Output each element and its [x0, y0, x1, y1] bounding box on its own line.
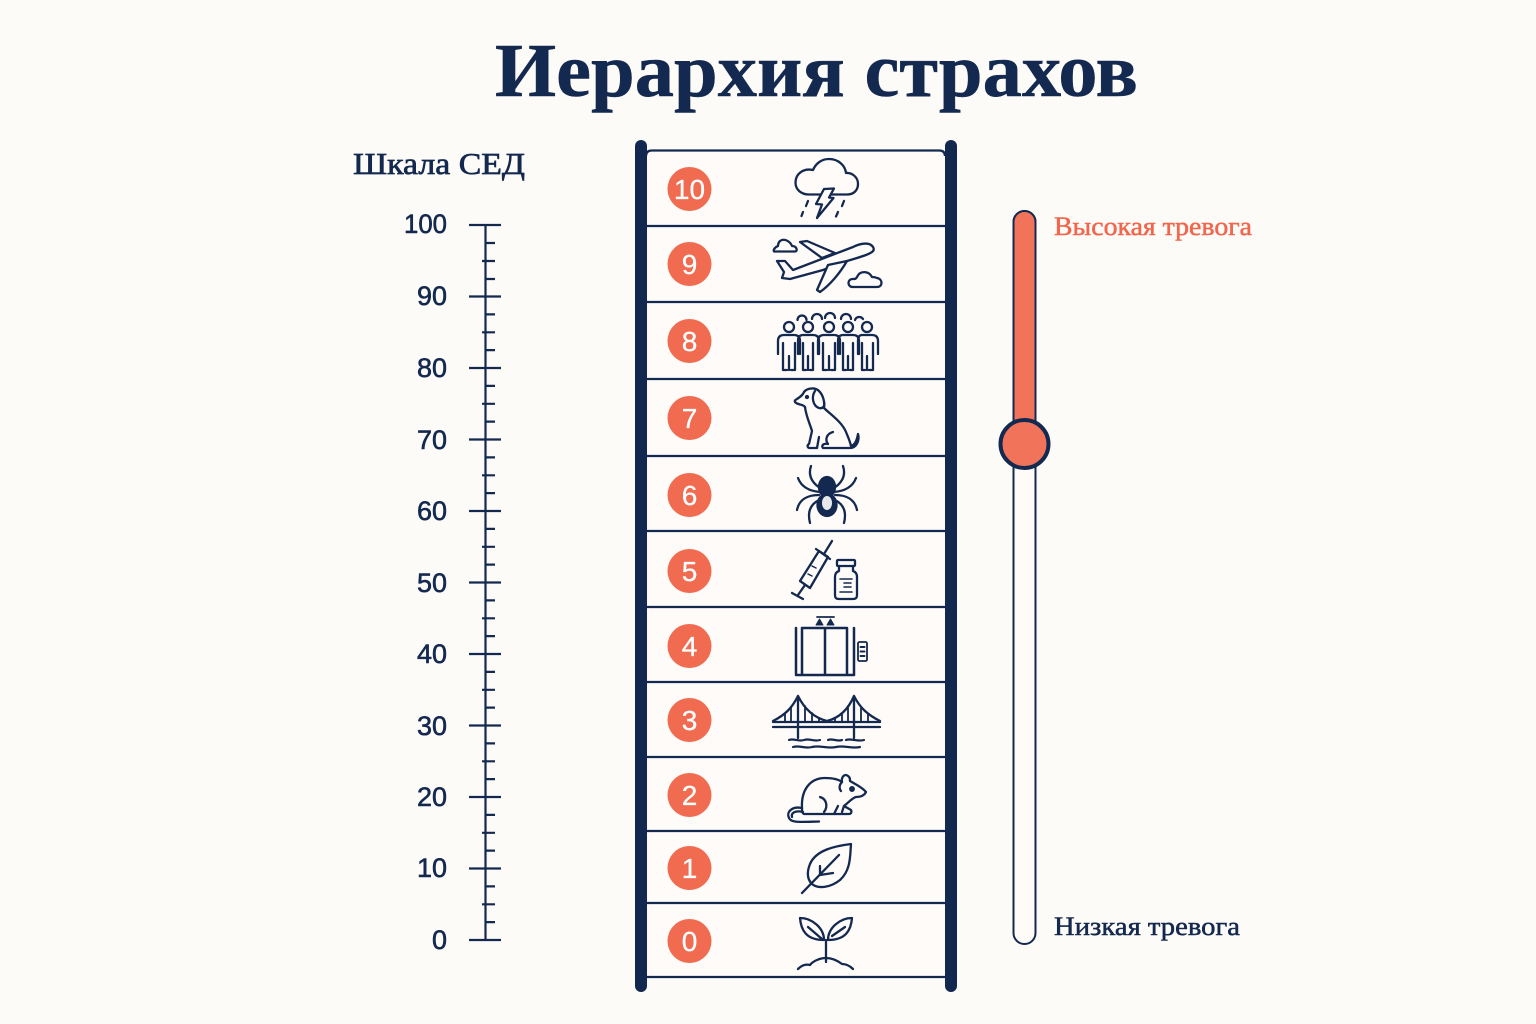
step 9 badge: 9	[682, 249, 697, 280]
ladder	[635, 140, 957, 992]
scale numbers: 80	[417, 353, 447, 383]
scale numbers: 0	[432, 925, 447, 955]
scale numbers: 50	[417, 568, 447, 598]
step 1 badge: 1	[682, 853, 697, 884]
left rail	[635, 140, 647, 992]
step 8 badge: 8	[682, 326, 697, 357]
icon: elevator	[796, 617, 867, 675]
icon: storm cloud	[796, 159, 858, 218]
slider fill	[1014, 211, 1036, 444]
slider knob	[1000, 420, 1048, 468]
title: Иерархия страхов	[495, 29, 1138, 113]
scale numbers: 40	[417, 639, 447, 669]
step 5 badge: 5	[682, 556, 697, 587]
right rail	[945, 140, 957, 992]
step 8 badge	[668, 319, 712, 363]
slider track	[1014, 211, 1036, 944]
step 0 badge	[668, 919, 712, 963]
icon: sprout	[798, 918, 853, 969]
back row	[798, 313, 863, 320]
step 10 badge: 10	[674, 174, 705, 205]
icon: dog	[795, 388, 859, 448]
SUD scale	[353, 146, 525, 955]
scale numbers: 30	[417, 711, 447, 741]
step 10 badge	[668, 167, 712, 211]
scale numbers	[404, 209, 447, 955]
scale numbers: 70	[417, 425, 447, 455]
step 3 badge: 3	[682, 705, 697, 736]
step 2 badge	[668, 773, 712, 817]
step 5 badge	[668, 549, 712, 593]
icon: crowd	[778, 313, 878, 370]
step 3 badge	[668, 698, 712, 742]
ladder rungs	[646, 150, 945, 977]
step 9 badge	[668, 242, 712, 286]
icon: syringe and vial	[792, 541, 857, 599]
step 4 badge: 4	[682, 631, 697, 662]
front row	[784, 322, 794, 332]
scale numbers: 10	[417, 853, 447, 883]
scale numbers: 100	[404, 209, 447, 239]
icon: suspension bridge	[773, 696, 880, 748]
step 1 badge	[668, 846, 712, 890]
anxiety slider	[1000, 211, 1252, 944]
step 6 badge	[668, 473, 712, 517]
icon: mouse	[788, 775, 866, 822]
step 7 badge	[668, 396, 712, 440]
step 7 badge: 7	[682, 403, 697, 434]
label: high anxiety: Высокая тревога	[1054, 212, 1252, 241]
step 6 badge: 6	[682, 480, 697, 511]
scale numbers: 20	[417, 782, 447, 812]
icon: spider	[797, 466, 857, 523]
ladder background	[646, 151, 945, 977]
scale axis and ticks	[469, 224, 501, 941]
scale numbers: 60	[417, 496, 447, 526]
step 2 badge: 2	[682, 780, 697, 811]
scale heading: Шкала СЕД	[353, 146, 525, 181]
icon: leaf	[802, 844, 851, 893]
step 0 badge: 0	[682, 926, 697, 957]
icon: airplane with clouds	[774, 240, 882, 292]
step 4 badge	[668, 624, 712, 668]
label: low anxiety: Низкая тревога	[1054, 912, 1240, 941]
scale numbers: 90	[417, 281, 447, 311]
